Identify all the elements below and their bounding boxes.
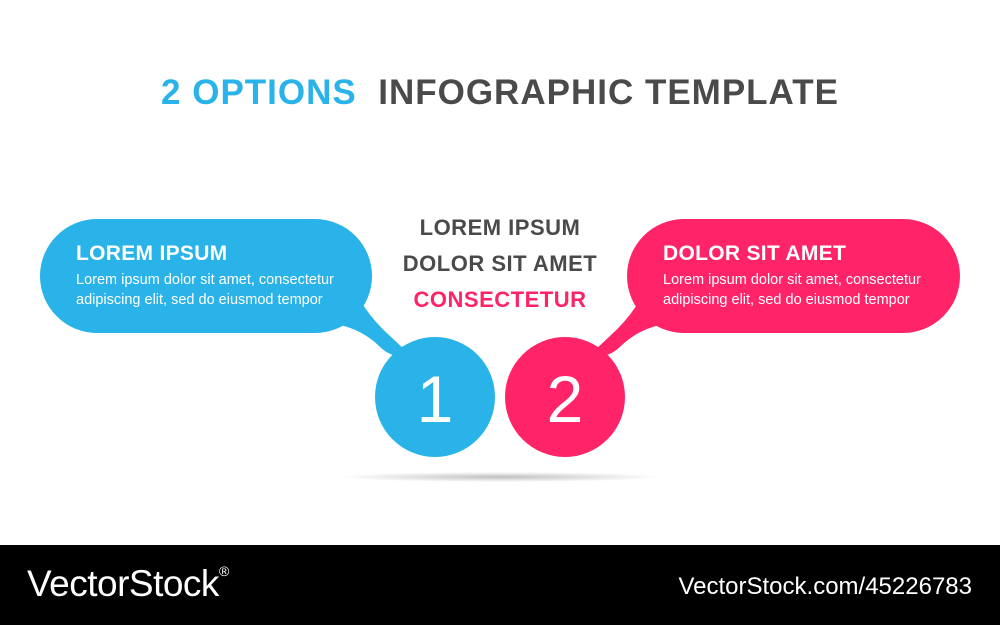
footer [0,545,1000,625]
option 2 text: adipiscing elit, sed do eiusmod tempor [663,292,910,308]
option 1 text: adipiscing elit, sed do eiusmod tempor [76,292,323,308]
center text: DOLOR SIT AMET [403,251,597,276]
option 2 shape [505,219,960,457]
center text: LOREM IPSUM [420,215,580,240]
option 2 text: Lorem ipsum dolor sit amet, consectetur [663,272,921,288]
title: 2 OPTIONS INFOGRAPHIC TEMPLATE [161,73,839,112]
footer: VectorStock.com/45226783 [678,573,972,600]
center text: CONSECTETUR [414,287,586,312]
option 2 text [663,242,921,308]
footer: VectorStock® [27,563,229,604]
option 1 shape: 1 [417,362,453,436]
option 1 text: LOREM IPSUM [76,242,227,265]
option 1 text: Lorem ipsum dolor sit amet, consectetur [76,272,334,288]
option 1 shape [40,219,495,457]
option 1 text [76,242,334,308]
center text [403,215,597,312]
option 2 text: DOLOR SIT AMET [663,242,846,265]
option 2 shape: 2 [547,362,583,436]
shadow [340,472,660,482]
